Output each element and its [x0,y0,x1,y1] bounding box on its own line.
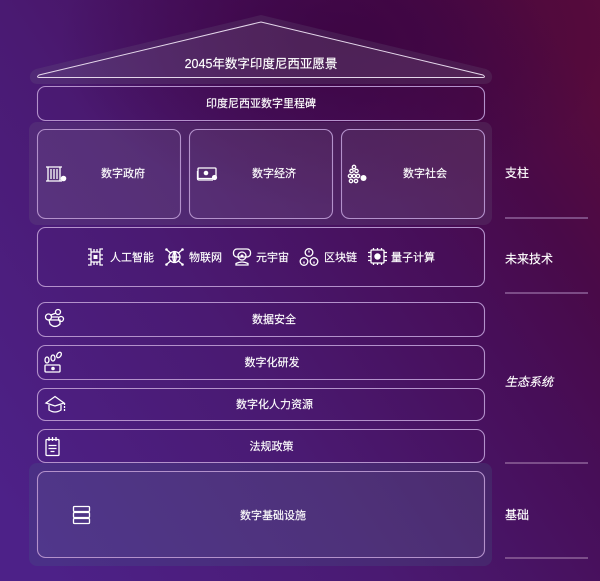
icon: linked blocks [300,249,318,265]
milestones bar [38,86,484,120]
icon: shield nodes [46,310,64,326]
label: foundation: 基础 [505,508,529,522]
icon: people network [348,165,366,183]
card: digital government: 数字政府 [101,166,145,180]
label: ecosystem [505,375,588,463]
item: IoT [165,248,222,266]
item: quantum computing: 量子计算 [391,250,435,264]
bar: data security: 数据安全 [252,312,296,326]
label: ecosystem: 生态系统 [505,375,555,389]
milestones bar: 印度尼西亚数字里程碑 [206,96,316,110]
item: quantum computing [368,248,435,265]
card: digital society: 数字社会 [403,166,447,180]
icon: notepad [46,437,59,456]
label: pillars [505,165,588,218]
card: digital economy: 数字经济 [252,166,296,180]
panel: pillars [29,122,492,225]
bar: digital R&D [38,346,484,380]
label: future technology [505,252,588,293]
roof: 2045 vision [30,15,492,84]
icon: graduation cap [46,396,64,412]
label: pillars: 支柱 [505,165,529,180]
icon: plant with banknote [45,351,62,372]
bar: law and policy: 法规政策 [250,439,294,453]
item: AI [88,249,154,265]
item: blockchain: 区块链 [324,250,357,264]
card: digital society [342,130,484,218]
bar: digital human resources: 数字化人力资源 [236,397,313,411]
roof: 2045 vision: 2045年数字印度尼西亚愿景 [185,56,337,71]
bar: data security [38,302,484,336]
icon: VR headset [234,249,250,265]
bar: law and policy [38,430,484,462]
icon: scroll [46,167,66,181]
label: foundation [505,508,588,558]
item: IoT: 物联网 [189,250,222,264]
panel: digital infrastructure [29,463,492,566]
icon: globe network [165,248,184,266]
icon: processor [368,248,387,265]
panel: digital infrastructure: 数字基础设施 [240,508,306,522]
item: blockchain [300,249,357,265]
item: metaverse: 元宇宙 [256,250,289,264]
icon: servers [74,506,90,524]
panel: future technology [38,228,484,286]
bar: digital R&D: 数字化研发 [244,355,300,369]
item: metaverse [234,249,289,265]
card: digital economy [190,130,332,218]
icon: AI chip [88,249,103,265]
item: AI: 人工智能 [110,250,154,264]
icon: banknote [198,168,217,180]
label: future technology: 未来技术 [505,252,553,266]
bar: digital human resources [38,388,484,420]
card: digital government [38,130,180,218]
